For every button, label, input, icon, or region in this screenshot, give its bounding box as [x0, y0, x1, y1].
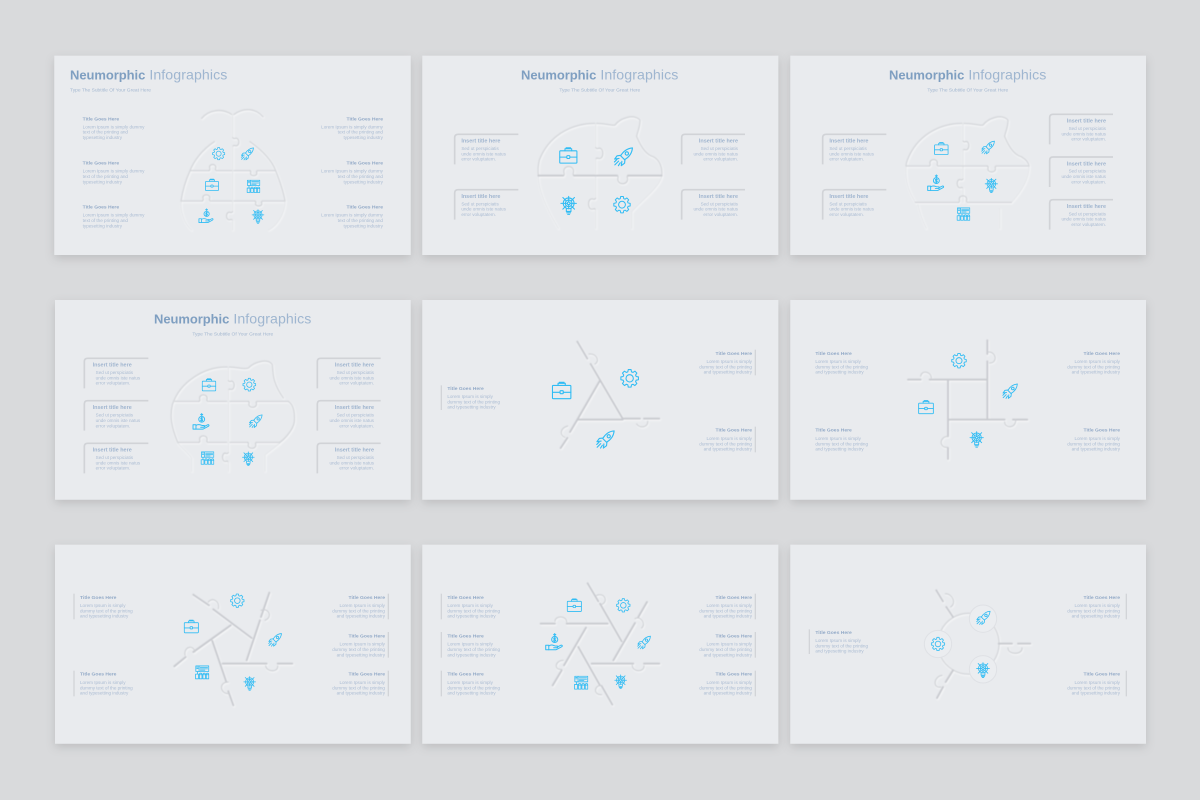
text box right 2: error voluptatem.: [339, 423, 374, 428]
text block right 1: [321, 116, 384, 140]
panel: brain puzzle six titles: [54, 56, 411, 255]
text block right 2: and typesetting industry: [1072, 447, 1121, 452]
text box right 3: Insert title here: [1067, 204, 1106, 210]
text block right 3: and typesetting industry: [704, 691, 753, 696]
text box left 2: error voluptatem.: [96, 423, 130, 428]
text block right 2: [332, 632, 389, 658]
text block right 2: Lorem Ipsum is simply: [706, 436, 753, 441]
text block left 3: text of the printing and: [83, 218, 128, 223]
text block right 1: dummy text of the printing: [1067, 364, 1120, 369]
text block left 1: Title Goes Here: [83, 116, 119, 122]
text block right 1: and typesetting industry: [337, 614, 386, 619]
text block right 2: [1067, 428, 1121, 452]
text box left 3: error voluptatem.: [96, 466, 130, 471]
text block right 2: Title Goes Here: [1084, 672, 1120, 678]
node: bulb circle: [969, 656, 997, 683]
text box right 3: unde omnis iste natus: [329, 460, 375, 465]
text box right 2: [317, 401, 381, 431]
text block left 1: dummy text of the printing: [80, 608, 133, 613]
text block left 3: Lorem Ipsum is simply dummy: [83, 213, 145, 218]
text block right 2: and typesetting industry: [704, 447, 753, 452]
text block left 1: Lorem Ipsum is simply: [447, 603, 494, 608]
text block right 1: text of the printing and: [338, 130, 383, 135]
text block left 2: Title Goes Here: [447, 634, 484, 640]
text box right 2: [682, 190, 745, 220]
panel: head puzzle five pieces: [790, 56, 1146, 255]
text box right 1: [682, 134, 745, 164]
text block left: Lorem Ipsum is simply: [447, 394, 494, 399]
text block right 1: [699, 594, 756, 619]
puzzle diagram: [561, 342, 659, 448]
text box right 1: Insert title here: [699, 139, 738, 145]
text box right 3: error voluptatem.: [339, 466, 374, 471]
text block right 1: Lorem Ipsum is simply: [706, 603, 753, 608]
text box left 1: unde omnis iste natus: [461, 151, 507, 156]
text block left 2: and typesetting industry: [80, 691, 129, 696]
subtitle: Type The Subtitle Of Your Great Here: [927, 87, 1009, 93]
text box right 1: error voluptatem.: [1071, 137, 1106, 142]
text block right 1: typesetting industry: [344, 135, 384, 140]
text block right 1: Lorem Ipsum is simply: [339, 603, 386, 608]
panel: triangle puzzle: [422, 300, 778, 500]
title: Neumorphic: [889, 67, 964, 82]
text box right 1: unde omnis iste natus: [329, 375, 375, 380]
text block right 1: Title Goes Here: [1084, 595, 1120, 601]
panel: hexagon puzzle: [422, 545, 778, 744]
title: [70, 67, 227, 83]
text block left: and typesetting industry: [447, 405, 496, 410]
text block right 1: [699, 350, 756, 375]
text block right 2: Title Goes Here: [349, 634, 385, 640]
node: gear circle: [924, 630, 952, 658]
icon: bulb: [252, 210, 264, 223]
subtitle: Type The Subtitle Of Your Great Here: [70, 87, 151, 93]
node: rocket circle: [969, 605, 997, 632]
text block right 2: text of the printing and: [338, 174, 383, 179]
text block left 1: and typesetting industry: [80, 614, 129, 619]
text box right 1: Sed ut perspiciatis: [337, 370, 375, 375]
icon: briefcase: [552, 382, 571, 399]
icon: money hand: [546, 634, 562, 650]
text box right 3: [1050, 200, 1113, 230]
panel: head puzzle four pieces: [422, 56, 778, 255]
icon: gear: [621, 370, 638, 387]
text block left 2: Title Goes Here: [80, 672, 117, 678]
text block left 2: Title Goes Here: [815, 428, 852, 434]
text block right 2: Lorem Ipsum is simply: [1074, 680, 1121, 685]
text block left 1: Title Goes Here: [815, 351, 852, 357]
text block right 2: Lorem Ipsum is simply: [1074, 436, 1121, 441]
text box left 2: Insert title here: [93, 405, 132, 411]
text box right 1: Sed ut perspiciatis: [1069, 126, 1107, 131]
icon: briefcase: [935, 143, 948, 155]
text box right 1: [317, 358, 381, 388]
text block right 2: dummy text of the printing: [1067, 441, 1120, 446]
text block right 3: Title Goes Here: [347, 205, 383, 211]
text block left 2: Lorem Ipsum is simply dummy: [83, 169, 145, 174]
text block right 1: and typesetting industry: [704, 370, 753, 375]
panel: head puzzle six pieces: [55, 300, 411, 500]
text block right 1: dummy text of the printing: [1067, 608, 1120, 613]
text block left 2: and typesetting industry: [447, 652, 496, 657]
icon: briefcase: [206, 179, 218, 191]
puzzle diagram: [541, 583, 659, 705]
text box right 2: unde omnis iste natus: [1061, 174, 1107, 179]
icon: money hand: [928, 175, 944, 190]
text box right 3: Insert title here: [335, 448, 374, 454]
text block right 2: [699, 427, 756, 452]
text box left 2: unde omnis iste natus: [96, 418, 141, 423]
icon: briefcase: [919, 401, 933, 414]
puzzle diagram: [171, 361, 294, 471]
puzzle diagram: [181, 110, 285, 230]
icon: bulb: [977, 663, 989, 678]
title: Infographics: [233, 311, 311, 327]
text box left 1: error voluptatem.: [96, 381, 130, 386]
text box right 1: error voluptatem.: [703, 157, 738, 162]
text box right 2: Insert title here: [699, 194, 738, 200]
text block left 2: [83, 161, 145, 184]
title: Neumorphic: [70, 67, 145, 82]
text box left 2: Sed ut perspiciatis: [96, 413, 134, 418]
icon: gear: [931, 637, 945, 651]
text block right 2: [321, 161, 384, 184]
text box right 2: Insert title here: [335, 405, 374, 411]
text box right 2: Sed ut perspiciatis: [337, 413, 375, 418]
icon: gear: [952, 353, 966, 368]
icon: dashboard: [575, 676, 588, 689]
text box left 1: Sed ut perspiciatis: [461, 146, 499, 151]
text block left 2: dummy text of the printing: [447, 647, 500, 652]
icon: briefcase: [202, 379, 216, 391]
text box right 1: Insert title here: [335, 363, 374, 369]
text block right 3: [332, 671, 389, 696]
text block left 1: Lorem Ipsum is simply dummy: [83, 125, 145, 130]
text box left 2: error voluptatem.: [829, 212, 864, 217]
icon: briefcase: [560, 148, 577, 163]
text block right 2: Lorem Ipsum is simply: [706, 642, 753, 647]
text block left 3: Title Goes Here: [447, 672, 484, 678]
text block left: dummy text of the printing: [447, 399, 500, 404]
icon: briefcase: [184, 620, 198, 633]
title: [889, 67, 1046, 83]
title: Neumorphic: [521, 67, 596, 82]
text box right 2: Sed ut perspiciatis: [1069, 169, 1107, 174]
text block left 2: and typesetting industry: [815, 447, 864, 452]
text box left 1: error voluptatem.: [829, 157, 864, 162]
title: Infographics: [600, 67, 678, 83]
text box left 1: [455, 134, 518, 164]
text block left: Title Goes Here: [815, 630, 852, 636]
text block left 1: typesetting industry: [83, 135, 123, 140]
text box right 3: error voluptatem.: [1071, 222, 1106, 227]
text block right 1: Title Goes Here: [1084, 351, 1120, 357]
puzzle diagram: [935, 590, 1030, 698]
text block left: [809, 629, 868, 654]
text block right 1: dummy text of the printing: [699, 608, 752, 613]
text block right 2: dummy text of the printing: [699, 647, 752, 652]
text block left 3: Title Goes Here: [83, 205, 119, 211]
text block left 3: [441, 671, 500, 696]
icon: dashboard: [957, 208, 970, 220]
text block left: [441, 385, 500, 410]
text block right 1: dummy text of the printing: [699, 364, 752, 369]
text box left 2: [823, 190, 886, 220]
text block right 3: Title Goes Here: [716, 672, 752, 678]
text block right 2: [699, 632, 756, 658]
title: [154, 311, 311, 327]
icon: rocket: [597, 431, 614, 448]
text box left 2: Sed ut perspiciatis: [461, 201, 499, 206]
text block right 1: Title Goes Here: [716, 595, 752, 601]
text block left 2: text of the printing and: [83, 174, 128, 179]
text box left 2: Insert title here: [829, 194, 868, 200]
text block right 1: Lorem Ipsum is simply: [1074, 359, 1121, 364]
text box right 2: [1050, 157, 1113, 187]
puzzle diagram: [538, 117, 662, 228]
icon: bulb: [244, 677, 256, 690]
text box right 3: Sed ut perspiciatis: [1069, 211, 1107, 216]
icon: dashboard: [201, 452, 214, 464]
text block left 1: text of the printing and: [83, 130, 128, 135]
title: Infographics: [149, 67, 227, 83]
text block right 2: dummy text of the printing: [332, 647, 385, 652]
text block right 2: Title Goes Here: [1084, 428, 1120, 434]
icon: briefcase: [567, 599, 581, 611]
icon: bulb: [970, 432, 983, 447]
text block right 2: and typesetting industry: [337, 652, 386, 657]
text block right 1: [1067, 594, 1127, 619]
icon: bulb: [615, 675, 627, 689]
text box right 1: Sed ut perspiciatis: [701, 146, 739, 151]
text block left 2: dummy text of the printing: [80, 685, 133, 690]
text box left 1: Insert title here: [93, 363, 132, 369]
text box left 1: Sed ut perspiciatis: [96, 370, 134, 375]
icon: gear: [231, 594, 244, 607]
title: Neumorphic: [154, 311, 229, 326]
puzzle diagram: [174, 593, 292, 705]
text box left 2: Insert title here: [461, 194, 500, 200]
text block left 3: [83, 205, 145, 228]
text box left 2: unde omnis iste natus: [461, 207, 507, 212]
text block left 3: typesetting industry: [83, 223, 123, 228]
icon: rocket: [241, 148, 253, 160]
title: [521, 67, 678, 83]
text block left 3: dummy text of the printing: [447, 685, 500, 690]
text block left 1: dummy text of the printing: [815, 364, 868, 369]
text block right 2: dummy text of the printing: [699, 441, 752, 446]
text block left 2: Title Goes Here: [83, 161, 119, 167]
text block right 2: Title Goes Here: [716, 634, 752, 640]
text box left 1: error voluptatem.: [461, 157, 496, 162]
text box right 3: Sed ut perspiciatis: [337, 455, 375, 460]
icon: dashboard: [247, 180, 260, 193]
text box left 1: unde omnis iste natus: [829, 151, 875, 156]
icon: rocket: [614, 148, 632, 166]
puzzle diagram: [906, 117, 1029, 228]
puzzle diagram: [908, 340, 1027, 459]
text block right 3: and typesetting industry: [337, 691, 386, 696]
text box left 1: [84, 358, 148, 388]
text box left 2: error voluptatem.: [461, 212, 496, 217]
icon: bulb: [985, 178, 997, 193]
text block right 2: Title Goes Here: [347, 161, 383, 167]
icon: gear: [243, 378, 256, 391]
icon: gear: [213, 148, 225, 160]
text box left 2: unde omnis iste natus: [829, 207, 875, 212]
text box right 1: Insert title here: [1067, 119, 1106, 125]
text box right 1: unde omnis iste natus: [693, 151, 739, 156]
text block right 2: Lorem Ipsum is simply: [339, 642, 386, 647]
text block left 1: Title Goes Here: [80, 595, 117, 601]
icon: bulb: [561, 196, 576, 214]
text block left 1: [83, 116, 145, 140]
text box left 3: unde omnis iste natus: [96, 460, 141, 465]
panel: pentagon puzzle: [55, 545, 411, 744]
icon: gear: [614, 196, 630, 213]
text block left 1: Title Goes Here: [447, 595, 484, 601]
text block right 1: Title Goes Here: [347, 116, 383, 122]
panel: square puzzle: [790, 300, 1146, 500]
text block left 1: dummy text of the printing: [447, 608, 500, 613]
text block right 1: and typesetting industry: [704, 614, 753, 619]
panel: circular puzzle: [790, 545, 1146, 744]
icon: gear: [617, 599, 630, 612]
text block left 1: [441, 594, 500, 619]
text box right 3: [317, 443, 381, 473]
text block right 1: Lorem Ipsum is simply dummy: [321, 125, 384, 130]
text block left 1: Lorem Ipsum is simply: [815, 359, 862, 364]
text box left 2: [455, 190, 518, 220]
text block left: Lorem Ipsum is simply: [815, 638, 862, 643]
text box left 3: Sed ut perspiciatis: [96, 455, 134, 460]
text block right 3: Title Goes Here: [349, 672, 385, 678]
text block left 1: [815, 351, 868, 375]
text box left 1: Insert title here: [829, 139, 868, 145]
text block right 3: text of the printing and: [338, 218, 383, 223]
text box left 3: [84, 443, 148, 473]
text block left 1: [73, 594, 133, 619]
subtitle: Type The Subtitle Of Your Great Here: [559, 87, 641, 93]
icon: bulb: [242, 452, 254, 466]
text block right 1: Lorem Ipsum is simply: [1074, 603, 1121, 608]
text box right 1: error voluptatem.: [339, 381, 374, 386]
text block right 1: and typesetting industry: [1072, 370, 1121, 375]
text box left 1: [823, 134, 886, 164]
text block right 1: Title Goes Here: [716, 351, 752, 357]
text block right 3: dummy text of the printing: [699, 685, 752, 690]
text box left 1: Insert title here: [461, 139, 500, 145]
text box left 1: unde omnis iste natus: [96, 375, 141, 380]
text block left 2: Lorem Ipsum is simply: [80, 680, 126, 685]
text box right 2: unde omnis iste natus: [693, 207, 739, 212]
text block right 2: [1067, 671, 1127, 696]
title: Infographics: [968, 67, 1046, 83]
text block left 2: [815, 428, 868, 452]
text block left: Title Goes Here: [447, 386, 484, 392]
text block right 2: Title Goes Here: [716, 428, 752, 434]
text block left 1: and typesetting industry: [447, 614, 496, 619]
icon: rocket: [249, 415, 262, 427]
text block right 2: and typesetting industry: [1072, 691, 1121, 696]
text block left: dummy text of the printing: [815, 643, 868, 648]
text box right 2: error voluptatem.: [703, 212, 738, 217]
text block right 3: [699, 671, 756, 696]
icon: dashboard: [196, 666, 209, 679]
icon: money hand: [193, 414, 209, 429]
subtitle: Type The Subtitle Of Your Great Here: [192, 331, 274, 337]
text box right 2: Insert title here: [1067, 161, 1106, 167]
text block right 3: Lorem Ipsum is simply dummy: [321, 213, 384, 218]
text block left 2: Lorem Ipsum is simply: [447, 642, 494, 647]
text block left 2: typesetting industry: [83, 179, 123, 184]
text block right 2: Lorem Ipsum is simply dummy: [321, 169, 384, 174]
text block left 3: and typesetting industry: [447, 691, 496, 696]
text block right 1: Title Goes Here: [349, 595, 385, 601]
text block right 1: [332, 594, 389, 619]
text block right 3: dummy text of the printing: [332, 685, 385, 690]
text block left 2: dummy text of the printing: [815, 441, 868, 446]
text box left 2: Sed ut perspiciatis: [829, 201, 867, 206]
text block left 3: Lorem Ipsum is simply: [447, 680, 494, 685]
icon: rocket: [269, 634, 281, 646]
text block left 1: Lorem Ipsum is simply: [80, 603, 126, 608]
text box right 2: unde omnis iste natus: [329, 418, 375, 423]
text box left 1: Sed ut perspiciatis: [829, 146, 867, 151]
text block left 2: [441, 632, 500, 658]
text block right 3: [321, 205, 384, 228]
icon: rocket: [977, 611, 990, 624]
text block right 1: and typesetting industry: [1072, 614, 1121, 619]
icon: rocket: [638, 636, 650, 649]
text block left 2: [73, 671, 133, 696]
text block right 2: and typesetting industry: [704, 652, 753, 657]
text box right 1: [1050, 114, 1113, 144]
icon: rocket: [982, 141, 994, 154]
text block right 3: Lorem Ipsum is simply: [706, 680, 753, 685]
text box left 3: Insert title here: [93, 448, 132, 454]
text block right 1: dummy text of the printing: [332, 608, 385, 613]
icon: money hand: [199, 209, 213, 223]
text block right 3: Lorem Ipsum is simply: [339, 680, 386, 685]
text box left 2: [84, 401, 148, 431]
text box right 1: unde omnis iste natus: [1061, 131, 1107, 136]
text block right 2: typesetting industry: [344, 179, 384, 184]
icon: rocket: [1003, 384, 1017, 398]
text block left: and typesetting industry: [815, 649, 864, 654]
text block right 1: Lorem Ipsum is simply: [706, 359, 753, 364]
text box right 2: Sed ut perspiciatis: [701, 201, 739, 206]
text box right 3: unde omnis iste natus: [1061, 217, 1107, 222]
text block right 2: dummy text of the printing: [1067, 685, 1120, 690]
text block right 1: [1067, 351, 1121, 375]
text block left 2: Lorem Ipsum is simply: [815, 436, 862, 441]
text block left 1: and typesetting industry: [815, 370, 864, 375]
text block right 3: typesetting industry: [344, 223, 384, 228]
text box right 2: error voluptatem.: [1071, 179, 1106, 184]
